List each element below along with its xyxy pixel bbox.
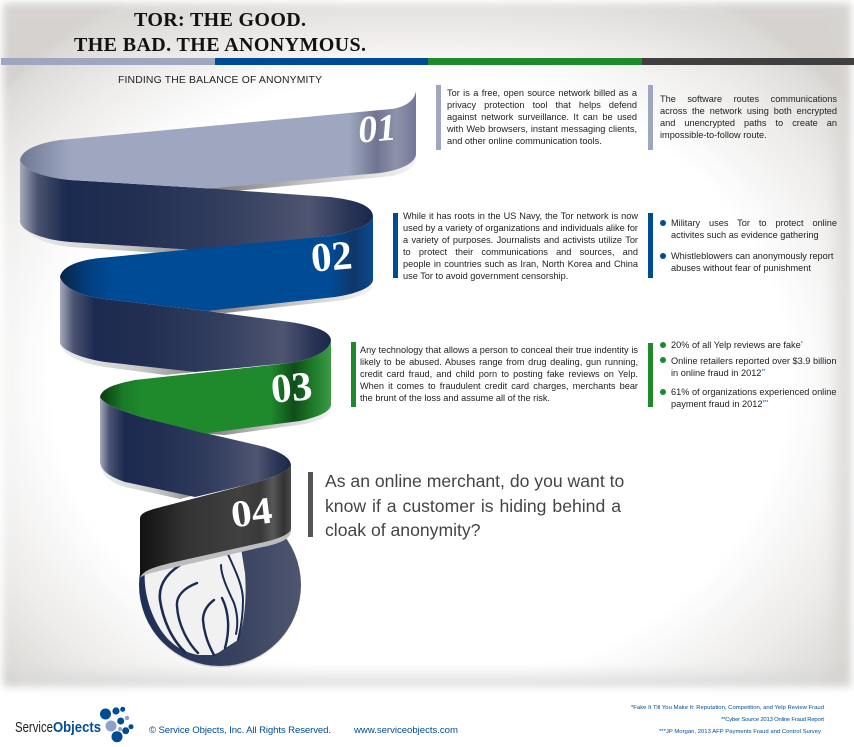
title: TOR: THE GOOD. (134, 9, 306, 31)
ribbon shadows (20, 155, 416, 578)
icon: onion globe (139, 504, 301, 668)
text block: routing: and unencrypted paths to create an (660, 118, 837, 128)
text block: who uses Tor: While it has roots in the US Navy, the Tor network is now (403, 211, 638, 221)
panel: 03 description (351, 342, 638, 407)
text block: who uses Tor: people in countries such as Iran, North Korea and China (403, 259, 638, 269)
ribbon segment 03: 03 (269, 362, 314, 412)
footnotes (631, 705, 824, 735)
panel: 02 description (393, 211, 638, 281)
ribbon segment 04: 04 (229, 490, 275, 536)
text block: abuse: the brunt of the loss and assume all of the risk. (360, 393, 550, 403)
text block: routing (660, 94, 837, 140)
text block: what Tor is: against network surveillance. It can be used (447, 112, 637, 122)
ribbon connector bands (20, 160, 373, 497)
ribbon segment 01 (20, 91, 416, 188)
bullet: online retailers: Online retailers reported over $3.9 billion (671, 356, 836, 366)
ribbon segment 04 (140, 465, 291, 578)
ribbon segment 02: 02 (309, 231, 354, 281)
bullet: military (660, 218, 837, 240)
text block: abuse: When it comes to fraudulent credit card charges, merchants bear (360, 381, 638, 391)
logo: Service Objects: Service (15, 720, 53, 736)
footer website: www.serviceobjects.com (353, 725, 458, 736)
text block: who uses Tor: a variety of purposes. Journalists and activists utilize Tor (403, 235, 638, 245)
panel: 01 description (436, 85, 637, 150)
bullet: military: activites such as evidence gathering (671, 230, 819, 240)
panel: 02 bullets (648, 213, 837, 278)
title (74, 9, 366, 56)
text block: abuse: credit card fraud, and child porn to posting fake reviews on Yelp. (360, 369, 638, 379)
bullet: yelp: 20% of all Yelp reviews are fake* (671, 340, 803, 350)
text block: question: As an online merchant, do you want to (325, 471, 624, 491)
logo: Service Objects (15, 707, 134, 742)
panel: 03 bullets (648, 340, 836, 409)
footnotes: *Fake It Till You Make It: Reputation, Competition, and Yelp Review Fraud (631, 705, 824, 711)
text block: what Tor is: Tor is a free, open source network billed as a (447, 88, 637, 98)
bullet: military: Military uses Tor to protect online (671, 218, 837, 228)
text block: what Tor is: privacy protection tool that helps defend (447, 100, 637, 110)
ribbon segment 03 (100, 340, 331, 434)
subtitle: FINDING THE BALANCE OF ANONYMITY (118, 75, 322, 86)
bullet: organizations: 61% of organizations experienced online (671, 387, 836, 397)
text block: who uses Tor (403, 211, 638, 281)
text block: routing: The software routes communications (660, 94, 837, 104)
bullet: organizations: payment fraud in 2012*** (671, 399, 768, 409)
bullet: whistleblowers: abuses without fear of punishment (671, 263, 811, 273)
text block: what Tor is: and other online communication tools. (447, 136, 602, 146)
title: THE BAD. THE ANONYMOUS. (74, 34, 366, 56)
text block: routing: impossible-to-follow route. (660, 130, 767, 140)
callout: 04 question (308, 471, 624, 540)
text block: routing: across the network using both encrypted (660, 106, 837, 116)
bullet: online retailers (660, 356, 836, 378)
ribbon segment 01: 01 (356, 106, 398, 152)
text block: question: cloak of anonymity? (325, 520, 480, 540)
bullet: whistleblowers (660, 251, 834, 273)
text block: abuse: Any technology that allows a person to conceal their true indentity is (360, 345, 638, 355)
header colour bar (1, 58, 854, 65)
text block: question: know if a customer is hiding behind a (325, 496, 621, 516)
footnotes: ***JP Morgan, 2013 AFP Payments Fraud and Control Survey (659, 729, 821, 735)
text block: question (325, 471, 624, 540)
text block: who uses Tor: to protect their communications and sources, and (403, 247, 638, 257)
text block: who uses Tor: use Tor to avoid government censorship. (403, 271, 568, 281)
ribbon segment 02 (60, 216, 373, 311)
bullet: whistleblowers: Whistleblowers can anonymously report (671, 251, 833, 261)
text block: what Tor is (447, 88, 637, 146)
text block: who uses Tor: used by a variety of organizations and individuals alike for (403, 223, 638, 233)
footnotes: **Cyber Source 2013 Online Fraud Report (721, 717, 824, 723)
text block: abuse (360, 345, 638, 403)
logo: Service Objects: Objects (53, 720, 101, 736)
text block: what Tor is: with Web browsers, instant messaging clients, (447, 124, 637, 134)
text block: abuse: likely to be abused. Abuses range from drug dealing, gun running, (360, 357, 638, 367)
panel: 01 routing note (648, 85, 837, 150)
footer copyright: © Service Objects, Inc. All Rights Reserved. (149, 725, 331, 736)
bullet: online retailers: in online fraud in 2012** (671, 368, 765, 378)
bullet: organizations (660, 387, 836, 409)
